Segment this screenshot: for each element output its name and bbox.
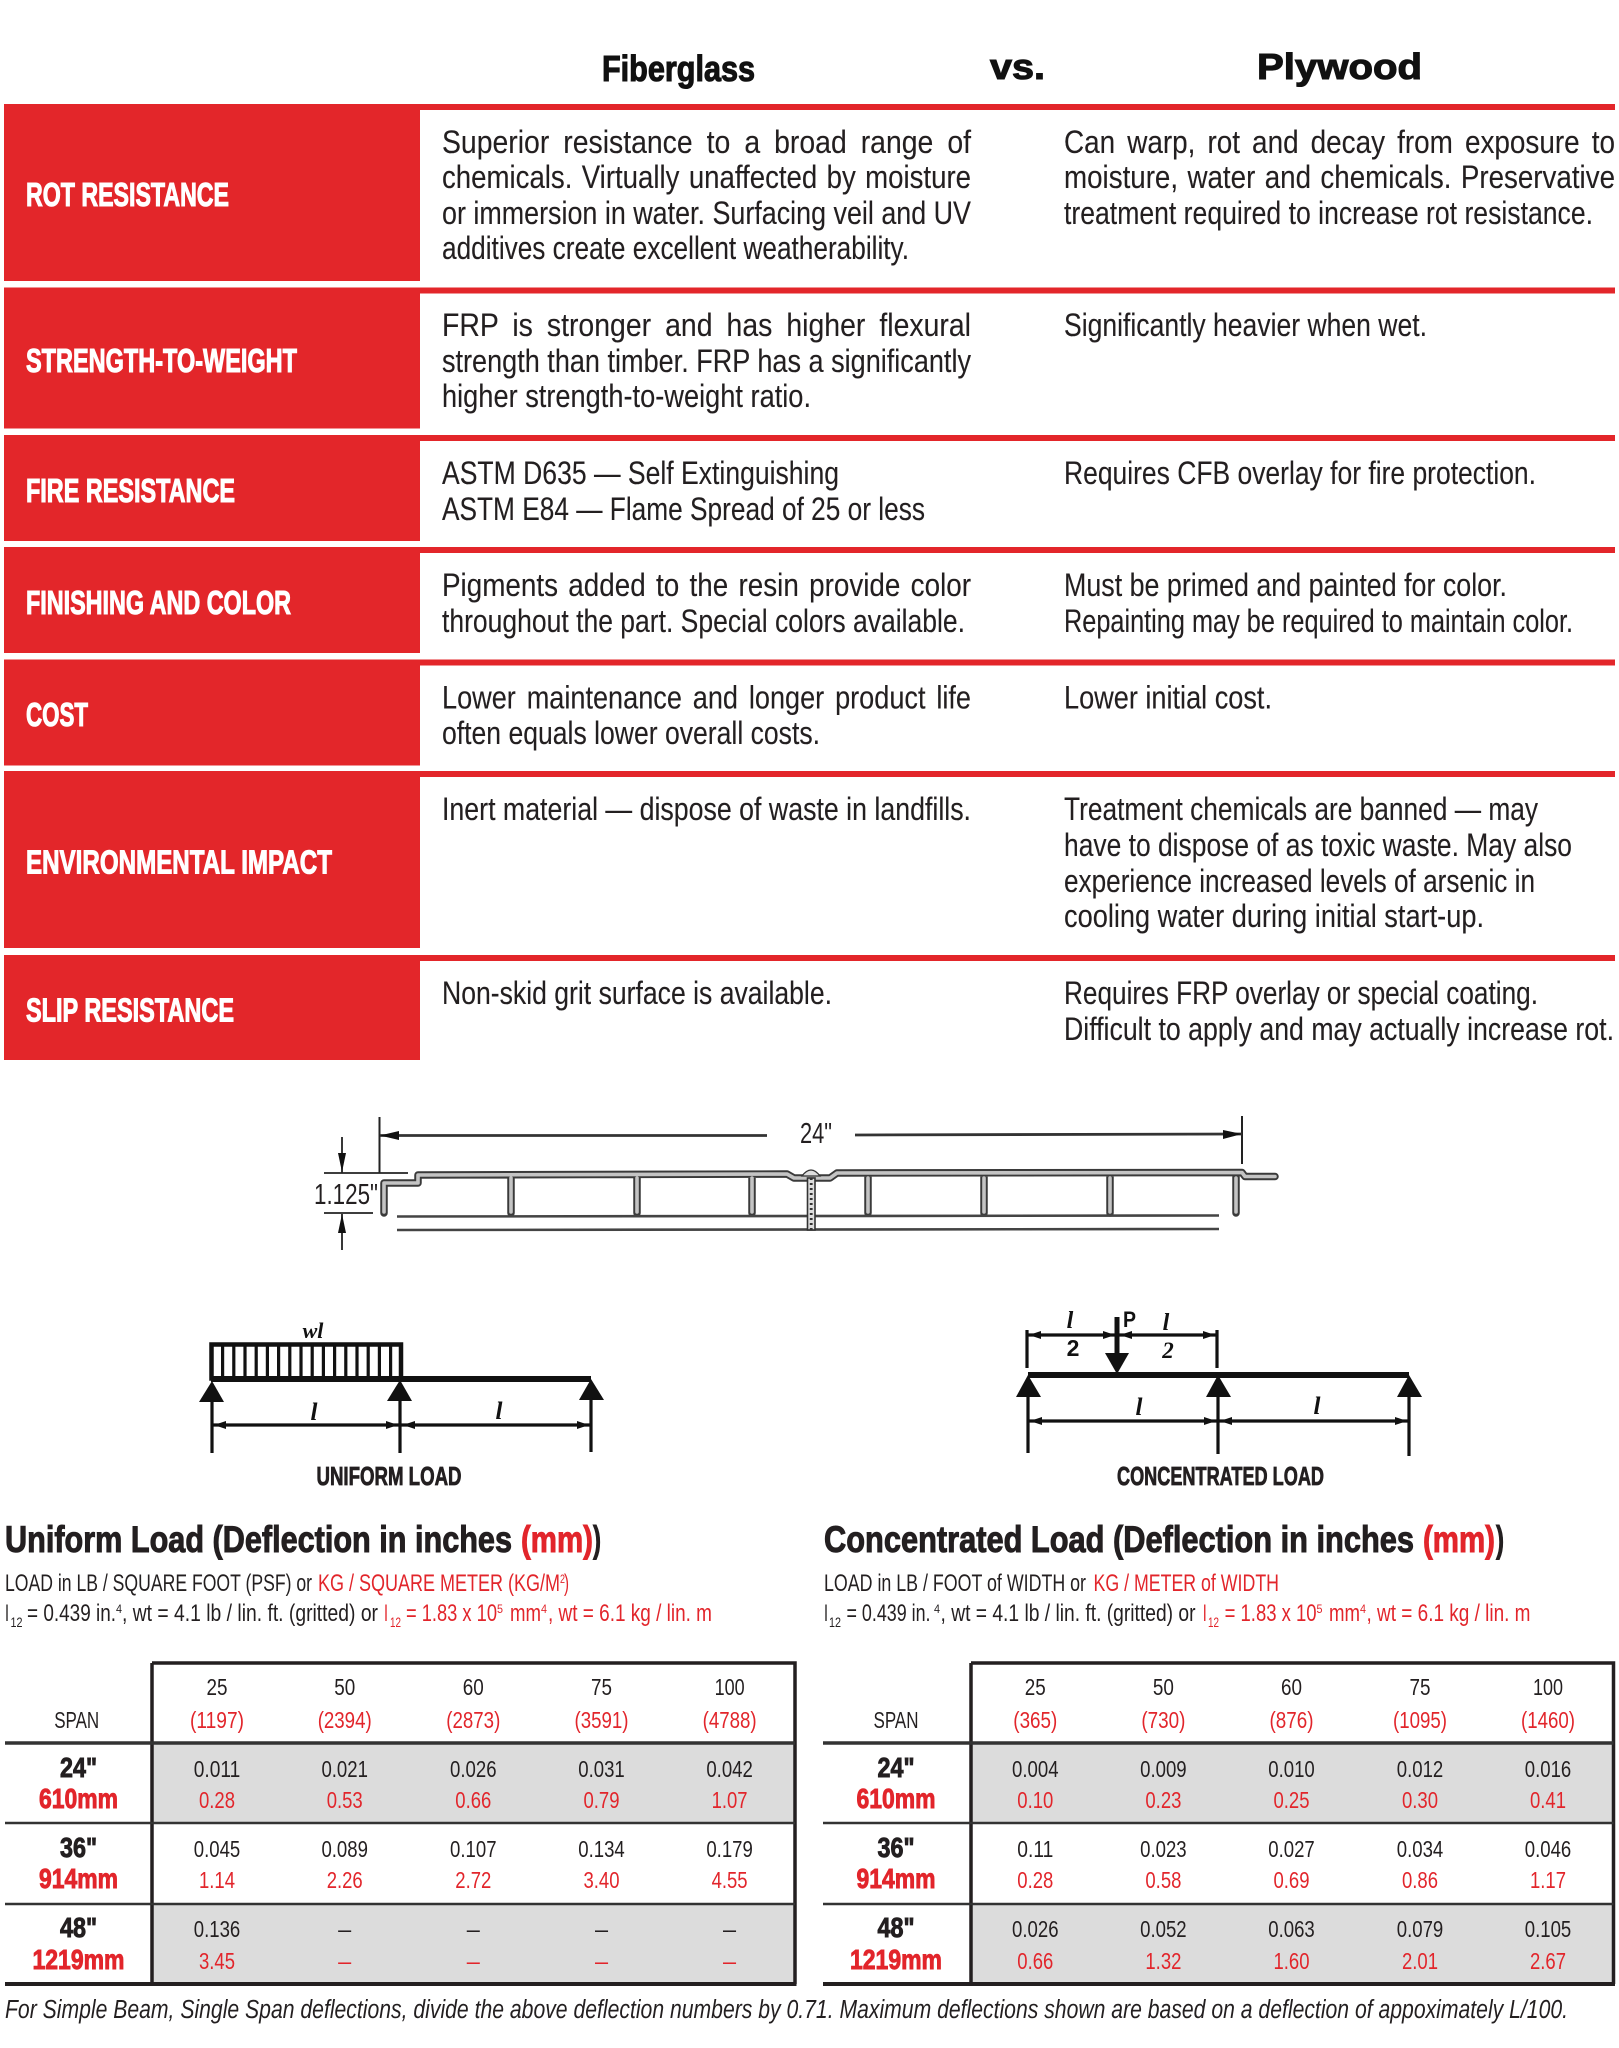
row: 36 inch span: 0.046 [1525, 1836, 1571, 1862]
heading: uniform load deflection: (mm) [521, 1519, 593, 1560]
section properties line: 5 [497, 1602, 503, 1616]
drawing: panel profile [384, 1170, 1275, 1230]
row: rot resistance: Superior resistance to a broad range of [442, 124, 972, 160]
row: 24 inch span: 0.25 [1274, 1787, 1310, 1813]
row: 36 inch span: 914mm [856, 1863, 936, 1894]
row: cost: COST [26, 696, 88, 733]
diagram: panel cross-section profile with dimensions [314, 1116, 1275, 1250]
table: concentrated load deflection [823, 1663, 1615, 1984]
row: slip resistance: Non-skid grit surface is available. [442, 975, 832, 1011]
row: slip resistance [4, 955, 1615, 1060]
row: 36 inch span: 0.11 [1017, 1836, 1053, 1862]
heading: uniform load deflection: ) [593, 1519, 601, 1560]
section properties line: I [5, 1600, 9, 1627]
table header: 25 [206, 1674, 228, 1700]
table header: (3591) [574, 1707, 628, 1733]
row: 24 inch span: 0.042 [706, 1756, 753, 1782]
row: strength-to-weight: Significantly heavier when wet. [1064, 307, 1427, 343]
section properties line: 12 [10, 1615, 22, 1630]
row: 48 inch span: 0.026 [1012, 1916, 1059, 1942]
row: environmental impact: cooling water during initial start-up. [1064, 898, 1484, 934]
section properties line: 4 [541, 1602, 547, 1616]
section properties line: 4 [116, 1602, 122, 1616]
row: strength-to-weight: strength than timber. FRP has a significantly [442, 343, 972, 379]
row: 48 inch span: – [595, 1916, 609, 1942]
table header: (730) [1141, 1707, 1185, 1733]
row: 48 inch span: – [338, 1916, 352, 1942]
half-span dimension: l [1163, 1310, 1170, 1336]
row: 36 inch span: 3.40 [584, 1867, 620, 1893]
row: 48 inch span: – [338, 1948, 352, 1974]
row: finishing and color [4, 547, 1615, 653]
row: rot resistance: additives create excellent weatherability. [442, 230, 909, 266]
table header: (2873) [446, 1707, 500, 1733]
table header: 100 [715, 1674, 745, 1700]
row: rot resistance: ROT RESISTANCE [26, 176, 229, 213]
icon: distributed load block [212, 1344, 401, 1379]
table header: (1460) [1521, 1707, 1575, 1733]
row: 36 inch span: 0.107 [450, 1836, 497, 1862]
row: 24 inch span: 0.66 [455, 1787, 491, 1813]
row: 48 inch span: – [467, 1916, 481, 1942]
heading: Fiberglass: Fiberglass [602, 48, 755, 89]
table header: 50 [1153, 1674, 1174, 1700]
row: 36 inch span: 0.089 [321, 1836, 368, 1862]
section properties line [824, 1600, 1530, 1630]
row: cost: often equals lower overall costs. [442, 715, 820, 751]
row: 48 inch span: 2.67 [1530, 1948, 1566, 1974]
section properties line: 12 [829, 1615, 841, 1630]
section properties line: 12 [1208, 1615, 1219, 1630]
row: 48 inch span: 0.052 [1140, 1916, 1187, 1942]
load units line: ) [564, 1570, 569, 1597]
load units line: KG / METER of WIDTH [1094, 1570, 1279, 1597]
page header: column titles [602, 46, 1422, 89]
row: 24 inch span: 0.009 [1140, 1756, 1187, 1782]
table header: (1095) [1393, 1707, 1447, 1733]
row: 36 inch span: 4.55 [712, 1867, 748, 1893]
row: 48 inch span: – [723, 1916, 737, 1942]
half-span dimension: l [1067, 1308, 1074, 1334]
row: 24 inch span: 610mm [856, 1783, 936, 1814]
row: environmental impact: ENVIRONMENTAL IMPACT [26, 844, 332, 880]
row: 36 inch span: 914mm [39, 1863, 118, 1894]
row: environmental impact [4, 771, 1615, 948]
row: strength-to-weight [4, 288, 1615, 428]
row: fire resistance: FIRE RESISTANCE [26, 472, 235, 509]
table header: SPAN [874, 1707, 918, 1733]
section properties line: = 0.439 in. [846, 1600, 930, 1627]
section properties line: I [1203, 1600, 1207, 1627]
row: 36 inch span: 1.17 [1530, 1867, 1566, 1893]
row: rot resistance: or immersion in water. Surfacing veil and UV [442, 195, 971, 231]
row: 24 inch span: 24" [60, 1752, 97, 1783]
heading: uniform load deflection: Uniform Load (Deflection in inches [5, 1519, 512, 1560]
row: 36 inch span: 0.69 [1274, 1867, 1310, 1893]
table header: (2394) [318, 1707, 372, 1733]
row: strength-to-weight: higher strength-to-weight ratio. [442, 378, 811, 414]
row: cost [4, 660, 1615, 766]
row: strength-to-weight: FRP is stronger and has higher flexural [442, 307, 971, 343]
table header: (4788) [703, 1707, 757, 1733]
table: uniform load deflection [5, 1663, 796, 1984]
load units line: 2 [560, 1572, 565, 1586]
diagram: uniform load beam [199, 1318, 604, 1491]
row: finishing and color: FINISHING AND COLOR [26, 584, 291, 621]
row: 24 inch span: 0.011 [194, 1756, 240, 1782]
row: 24 inch span: 0.41 [1530, 1787, 1566, 1813]
beam, supports and spans: l [311, 1399, 318, 1426]
row: 24 inch span: 0.79 [584, 1787, 620, 1813]
section properties line [5, 1600, 712, 1630]
row: 24 inch span [39, 1752, 753, 1814]
row: 36 inch span [39, 1832, 753, 1894]
row: 24 inch span: 0.026 [450, 1756, 497, 1782]
row: fire resistance: ASTM D635 — Self Extinguishing [442, 455, 839, 491]
dimension: 24 inch width [380, 1116, 1242, 1173]
beam, supports and spans: l [496, 1398, 503, 1425]
section properties line: , wt = 6.1 kg / lin. m [548, 1600, 712, 1627]
table header: (1197) [190, 1707, 244, 1733]
table header: 60 [1281, 1674, 1302, 1700]
table header [54, 1674, 757, 1733]
row: 36 inch span: 0.28 [1017, 1867, 1053, 1893]
row: 48 inch span: 1219mm [32, 1944, 124, 1975]
table header: 25 [1025, 1674, 1046, 1700]
row: 36 inch span: 1.14 [199, 1867, 235, 1893]
row: 36 inch span: 0.045 [194, 1836, 240, 1862]
row: 48 inch span: 0.105 [1525, 1916, 1571, 1942]
row: 24 inch span: 0.010 [1268, 1756, 1315, 1782]
caption: concentrated load: CONCENTRATED LOAD [1117, 1461, 1324, 1491]
row: 24 inch span: 0.031 [578, 1756, 625, 1782]
row: 36 inch span: 0.027 [1268, 1836, 1315, 1862]
row: 24 inch span: 0.016 [1525, 1756, 1571, 1782]
row: finishing and color: Must be primed and painted for color. [1064, 567, 1507, 603]
row: 48 inch span: 1.32 [1145, 1948, 1181, 1974]
row: 24 inch span: 0.28 [199, 1787, 235, 1813]
row: 24 inch span [856, 1752, 1571, 1814]
row: finishing and color: throughout the part. Special colors available. [442, 603, 965, 639]
row: 24 inch span: 610mm [39, 1783, 118, 1814]
row: 48 inch span: 0.063 [1268, 1916, 1315, 1942]
dimension: 24 inch width: 24" [800, 1118, 832, 1150]
row: 48 inch span: 2.01 [1402, 1948, 1438, 1974]
panel: comparison table [4, 104, 1615, 1060]
row: fire resistance: ASTM E84 — Flame Spread of 25 or less [442, 491, 925, 527]
row: environmental impact: Inert material — dispose of waste in landfills. [442, 791, 971, 827]
row: 36 inch span: 0.134 [578, 1836, 625, 1862]
heading: vs.: vs. [990, 46, 1045, 87]
row: 36 inch span: 0.86 [1402, 1867, 1438, 1893]
table header: SPAN [54, 1707, 99, 1733]
heading: concentrated load deflection: Concentrated Load (Deflection in inches [824, 1519, 1414, 1560]
table header: 60 [463, 1674, 484, 1700]
row: 48 inch span [32, 1912, 737, 1975]
icon: point load arrow P: P [1123, 1307, 1136, 1332]
table header: 50 [334, 1674, 355, 1700]
load units line: KG / SQUARE METER (KG/M [318, 1570, 560, 1597]
heading: Plywood: Plywood [1257, 46, 1422, 87]
row: 48 inch span: 1.60 [1274, 1948, 1310, 1974]
row: 36 inch span: 36" [60, 1832, 97, 1863]
load units line: LOAD in LB / FOOT of WIDTH or [824, 1570, 1086, 1597]
section properties line: = 0.439 in. [27, 1600, 116, 1627]
section properties line: I [824, 1600, 828, 1627]
row: 48 inch span: 48" [60, 1912, 97, 1943]
row: 48 inch span: 48" [878, 1912, 914, 1943]
table header: 75 [1410, 1674, 1430, 1700]
row: 36 inch span: 0.179 [706, 1836, 753, 1862]
section properties line: 5 [1316, 1602, 1323, 1616]
row: 48 inch span: – [467, 1948, 481, 1974]
row: fire resistance [4, 435, 1615, 541]
caption: uniform load: UNIFORM LOAD [316, 1461, 462, 1491]
row: 24 inch span: 0.012 [1397, 1756, 1443, 1782]
section properties line: 4 [1360, 1602, 1366, 1616]
row: 48 inch span: – [723, 1948, 737, 1974]
half-span dimension: 2 [1067, 1335, 1079, 1361]
row: rot resistance [4, 104, 1615, 281]
table header: 100 [1533, 1674, 1563, 1700]
row: 48 inch span: 0.136 [194, 1916, 240, 1942]
section properties line: mm [1329, 1600, 1360, 1627]
row: cost: Lower maintenance and longer product life [442, 680, 971, 716]
section properties line: 4 [934, 1602, 940, 1616]
row: 24 inch span: 0.021 [321, 1756, 368, 1782]
section properties line: = 1.83 x 10 [406, 1600, 497, 1627]
heading: concentrated load deflection: ) [1496, 1519, 1504, 1560]
beam, supports and spans: l [1314, 1393, 1321, 1420]
section properties line: 12 [390, 1615, 401, 1630]
table header: (365) [1013, 1707, 1057, 1733]
row: 24 inch span: 0.30 [1402, 1787, 1438, 1813]
row: slip resistance: SLIP RESISTANCE [26, 992, 234, 1028]
heading: concentrated load deflection: (mm) [1423, 1519, 1495, 1560]
section properties line: , wt = 4.1 lb / lin. ft. (gritted) or [940, 1600, 1196, 1627]
row: 48 inch span [850, 1912, 1571, 1975]
table header: 75 [591, 1674, 612, 1700]
beam, supports and spans: l [1136, 1394, 1143, 1421]
row: 48 inch span: 0.66 [1017, 1948, 1053, 1974]
dimension: 1.125 inch depth [314, 1137, 408, 1250]
section properties line: , wt = 6.1 kg / lin. m [1366, 1600, 1530, 1627]
row: 24 inch span: 0.004 [1012, 1756, 1059, 1782]
row: 36 inch span: 0.58 [1145, 1867, 1181, 1893]
section properties line: mm [510, 1600, 541, 1627]
row: 36 inch span: 0.034 [1397, 1836, 1443, 1862]
row: 24 inch span: 0.23 [1145, 1787, 1181, 1813]
row: strength-to-weight: STRENGTH-TO-WEIGHT [26, 342, 297, 379]
beam, supports and spans [199, 1379, 604, 1453]
row: cost: Lower initial cost. [1064, 680, 1272, 716]
row: 36 inch span [856, 1832, 1571, 1894]
icon: point load arrow P [1105, 1307, 1136, 1374]
panel: uniform load text block [5, 1519, 712, 1630]
row: 24 inch span: 0.53 [327, 1787, 363, 1813]
row: 48 inch span: 3.45 [199, 1948, 235, 1974]
row: 48 inch span: 1219mm [850, 1944, 942, 1975]
row: 36 inch span: 0.023 [1140, 1836, 1187, 1862]
row: 36 inch span: 2.72 [455, 1867, 491, 1893]
section properties line: = 1.83 x 10 [1225, 1600, 1317, 1627]
row: 48 inch span: – [595, 1948, 609, 1974]
half-span dimension: 2 [1161, 1338, 1174, 1363]
label: wl: wl [303, 1318, 324, 1343]
row: 36 inch span: 2.26 [327, 1867, 363, 1893]
table header: (876) [1270, 1707, 1314, 1733]
panel: concentrated load text block [824, 1519, 1530, 1630]
dimension: 1.125 inch depth: 1.125" [314, 1179, 378, 1211]
row: finishing and color: Pigments added to the resin provide color [442, 567, 971, 603]
section properties line: I [384, 1600, 388, 1627]
section properties line: , wt = 4.1 lb / lin. ft. (gritted) or [122, 1600, 378, 1627]
row: 36 inch span: 36" [878, 1832, 914, 1863]
table header [874, 1674, 1575, 1733]
row: 24 inch span: 24" [878, 1752, 914, 1783]
half-span dimension [1027, 1308, 1217, 1368]
row: 24 inch span: 1.07 [712, 1787, 748, 1813]
load units line: LOAD in LB / SQUARE FOOT (PSF) or [5, 1570, 312, 1597]
row: 24 inch span: 0.10 [1017, 1787, 1053, 1813]
beam, supports and spans [1016, 1375, 1422, 1456]
row: rot resistance: chemicals. Virtually unaffected by moisture [442, 159, 971, 195]
row: 48 inch span: 0.079 [1397, 1916, 1443, 1942]
diagram: concentrated load beam [1016, 1307, 1422, 1491]
